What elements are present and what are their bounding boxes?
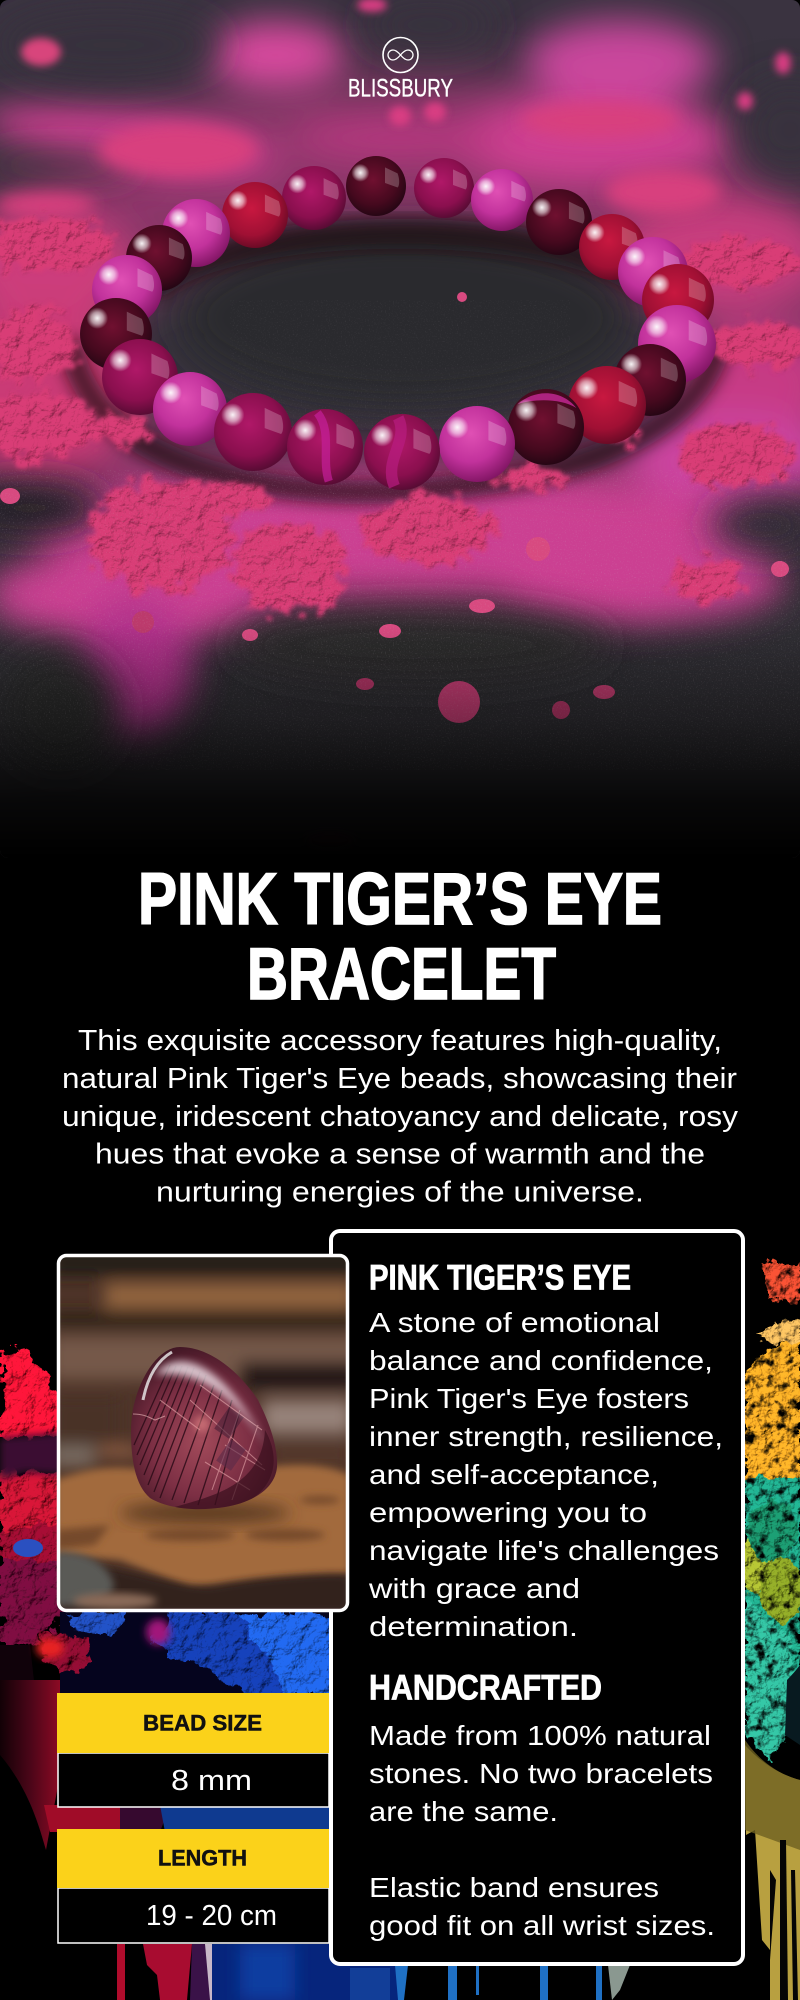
intro paragraph: natural Pink Tiger's Eye beads, showcasing their — [62, 1063, 737, 1095]
handcrafted text: Elastic band ensures — [369, 1872, 659, 1903]
powder clumps — [0, 219, 800, 614]
grain — [0, 470, 800, 770]
title: BRACELET — [247, 934, 556, 1015]
intro paragraph: This exquisite accessory features high-quality, — [78, 1025, 722, 1057]
bottom fade — [0, 625, 800, 860]
hero photo: bracelet on pink powder — [0, 0, 800, 860]
heading: handcrafted: HANDCRAFTED — [369, 1668, 602, 1708]
handcrafted text — [369, 1720, 715, 1941]
intro paragraph — [62, 1025, 739, 1208]
stone meaning text: and self-acceptance, — [369, 1459, 659, 1490]
spec table: length: LENGTH — [158, 1846, 247, 1870]
panel: stone description — [331, 1231, 743, 1964]
stone meaning text: Pink Tiger's Eye fosters — [369, 1383, 689, 1414]
stone meaning text: empowering you to — [369, 1497, 647, 1528]
spec table: bead size: BEAD SIZE — [143, 1710, 262, 1736]
stone meaning text: A stone of emotional — [369, 1307, 660, 1338]
intro paragraph: nurturing energies of the universe. — [156, 1176, 644, 1208]
beads — [80, 156, 716, 490]
handcrafted text: Made from 100% natural — [369, 1720, 711, 1751]
stone meaning text: balance and confidence, — [369, 1345, 713, 1376]
intro paragraph: hues that evoke a sense of warmth and the — [95, 1138, 705, 1170]
paint splash: blue fleck on red — [13, 1539, 43, 1557]
spec table: bead size: 8 mm — [171, 1765, 252, 1797]
spec table: length: 19 - 20 cm — [146, 1900, 277, 1932]
paint splash: bottom drips — [117, 1944, 630, 2000]
stone meaning text — [368, 1307, 723, 1642]
paint splash: between tables — [44, 1805, 335, 1832]
stone meaning text: determination. — [369, 1611, 578, 1642]
spec table: bead size — [57, 1693, 329, 1807]
stone meaning text: inner strength, resilience, — [369, 1421, 723, 1452]
stone — [131, 1347, 277, 1510]
intro paragraph: unique, iridescent chatoyancy and delicate, rosy — [62, 1101, 739, 1133]
title: PINK TIGER’S EYE — [138, 859, 662, 940]
loose powder dots — [21, 0, 791, 126]
stone photo — [50, 1250, 360, 1612]
dark patches — [0, 0, 800, 770]
title — [138, 859, 662, 1015]
stone meaning text: with grace and — [368, 1573, 580, 1604]
handcrafted text: stones. No two bracelets — [369, 1758, 713, 1789]
logo: Blissbury: BLISSBURY — [348, 74, 453, 102]
paint splash: left red — [0, 1350, 75, 1850]
handcrafted text: are the same. — [369, 1796, 558, 1827]
bracelet shadow — [70, 340, 720, 492]
handcrafted text: good fit on all wrist sizes. — [369, 1910, 715, 1941]
spec table: length — [57, 1829, 329, 1943]
logo: Blissbury — [348, 38, 453, 102]
paint splash: blue centre — [36, 1612, 340, 1695]
heading: pink tiger's eye: PINK TIGER’S EYE — [369, 1258, 631, 1298]
stone meaning text: navigate life's challenges — [369, 1535, 719, 1566]
paint splash: right orange, green and yellow — [739, 1264, 800, 2000]
out of focus powder — [0, 102, 721, 217]
